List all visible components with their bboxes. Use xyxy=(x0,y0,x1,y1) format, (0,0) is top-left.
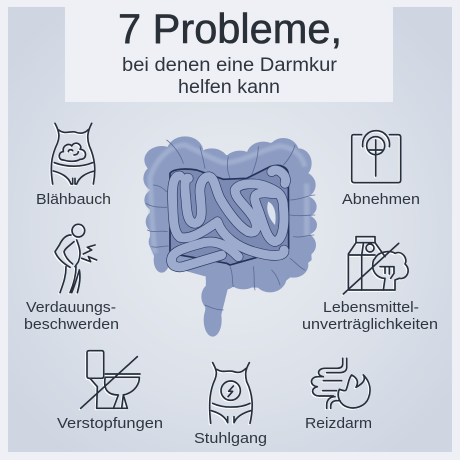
inner cavity xyxy=(170,165,289,265)
icon: person with digestive pain xyxy=(55,224,97,293)
label: Verdauungsbeschwerden: Verdauungs- xyxy=(26,299,116,316)
label: Blähbauch: Blähbauch xyxy=(36,191,111,208)
label: Lebensmittelunverträglichkeiten: unverträglichkeiten xyxy=(302,316,438,333)
label: Verdauungsbeschwerden: beschwerden xyxy=(24,316,119,333)
icon: belly with lightning xyxy=(210,363,252,423)
label: Stuhlgang: Stuhlgang xyxy=(194,430,267,447)
label: Lebensmittelunverträglichkeiten: Lebensmittel- xyxy=(323,299,419,316)
icon: intestine with flame xyxy=(311,358,370,408)
title box xyxy=(65,0,393,102)
colon creases xyxy=(146,140,315,310)
subtitle line 1: bei denen eine Darmkur xyxy=(122,55,338,76)
intestine illustration xyxy=(143,136,317,337)
icon: crossed-out toilet xyxy=(81,351,140,408)
title: 7 Probleme, xyxy=(118,5,342,52)
cloud xyxy=(59,143,85,161)
label: Lebensmittelunverträglichkeiten xyxy=(302,299,438,333)
label: Reizdarm: Reizdarm xyxy=(305,415,372,432)
icon: bloated belly xyxy=(51,123,95,184)
small intestine xyxy=(171,170,286,267)
label: Verdauungsbeschwerden xyxy=(24,299,119,333)
icon: scale xyxy=(352,131,401,183)
subtitle line 2: helfen kann xyxy=(178,77,280,98)
label: Verstopfungen: Verstopfungen xyxy=(57,415,163,432)
large intestine xyxy=(143,136,317,337)
colon highlight xyxy=(150,145,307,253)
icon: milk and broccoli crossed out xyxy=(343,237,408,294)
label: Abnehmen: Abnehmen xyxy=(342,191,420,208)
